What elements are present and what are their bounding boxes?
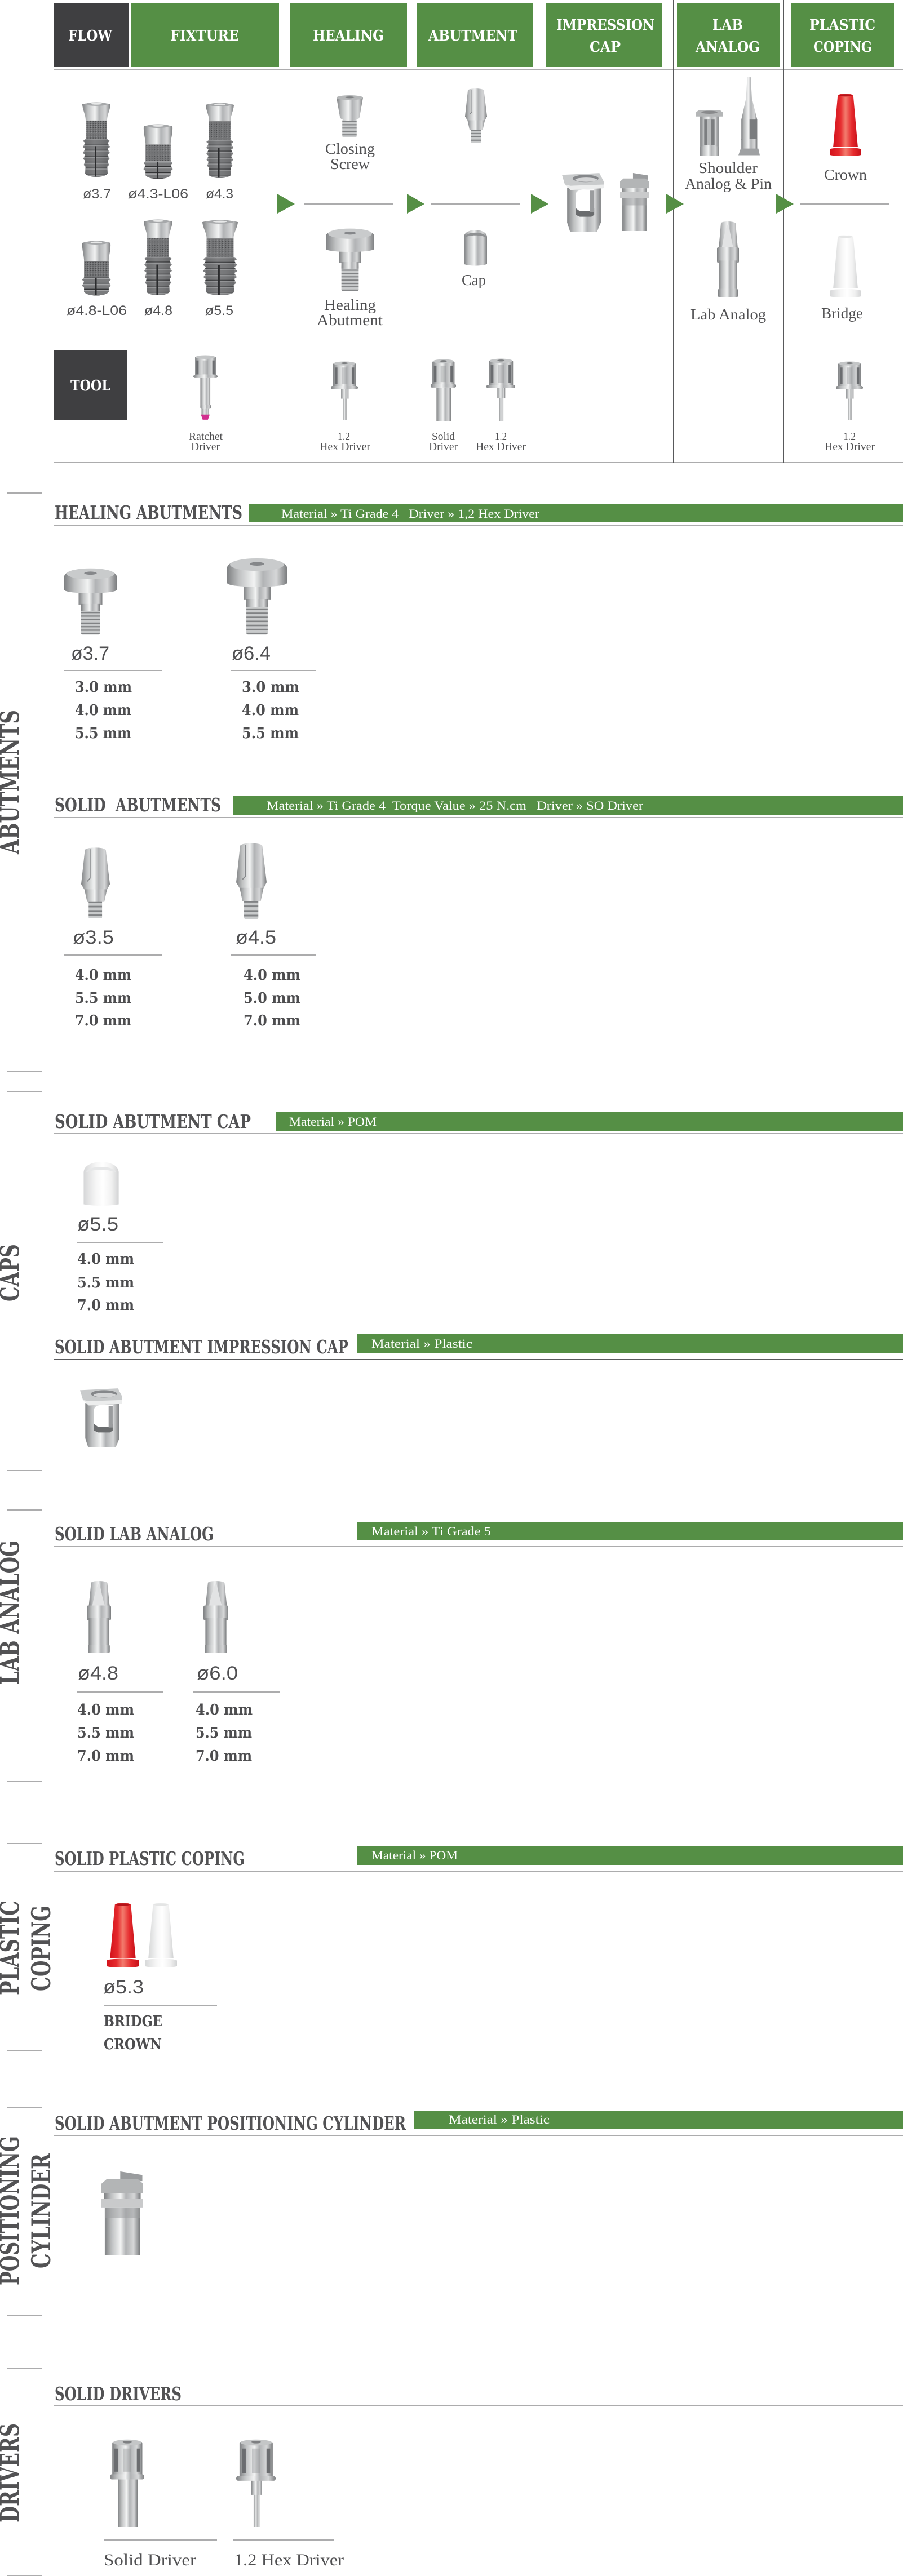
plastic coping header: PLASTIC	[809, 17, 875, 34]
lab analog header: ANALOG	[695, 39, 760, 56]
arrow 4	[666, 194, 684, 214]
arrow 5	[776, 194, 794, 214]
lab analog ø4.8: ø4.8	[78, 1663, 118, 1684]
spec bar: coping material: Material » POM	[371, 1848, 458, 1862]
lab analog: Lab Analog	[690, 306, 766, 323]
healing abutment: Healing	[324, 296, 376, 313]
heading: healing abutments: HEALING ABUTMENTS	[55, 501, 242, 523]
panel: flow chart	[54, 0, 903, 463]
healing abutment ø6.4: 4.0 mm	[242, 702, 299, 719]
solid abutment ø4.5: ø4.5	[236, 927, 276, 948]
healing abutment ø6.4: ø6.4	[232, 643, 271, 664]
panel: plastic coping	[0, 1844, 903, 2053]
impression cap	[562, 173, 604, 232]
heading: positioning cylinder: SOLID ABUTMENT POSITIONING CYLINDER	[55, 2112, 406, 2134]
fixture ø4.8: ø4.8	[144, 303, 172, 318]
closing screw: Closing	[325, 140, 375, 157]
fixture ø4.3: ø4.3	[206, 186, 233, 202]
fixture ø4.8	[144, 220, 172, 318]
lab analog header	[677, 3, 780, 67]
solid abutment ø4.5	[231, 843, 316, 1029]
heading: solid lab analog: SOLID LAB ANALOG	[55, 1523, 214, 1545]
abutment header: ABUTMENT	[428, 28, 518, 45]
lab analog ø4.8: 4.0 mm	[77, 1702, 134, 1718]
fixture ø4.3-L06	[128, 125, 188, 202]
flow header box	[54, 3, 129, 67]
spec bar: cap material: Material » POM	[289, 1114, 377, 1129]
spec bar: solid abutments	[233, 796, 903, 815]
spec bar: cylinder material: Material » Plastic	[449, 2112, 550, 2126]
lab analog ø6.0: 4.0 mm	[196, 1702, 253, 1718]
lab analog ø4.8: 5.5 mm	[77, 1725, 134, 1742]
red and white copings	[107, 1903, 177, 1967]
arrow 1	[277, 194, 295, 214]
spec bar: healing abutments: Material » Ti Grade 4 Driver » 1,2 Hex Driver	[281, 507, 540, 521]
ratchet driver: Ratchet	[189, 430, 223, 443]
fixture ø5.5: ø5.5	[205, 303, 233, 318]
positioning cylinder icon	[101, 2171, 143, 2255]
healing abutment ø3.7	[64, 569, 162, 742]
impression cap header: CAP	[590, 39, 621, 56]
shoulder analog and pin	[685, 77, 772, 192]
healing abutment ø6.4: 3.0 mm	[242, 679, 299, 696]
tool box	[54, 350, 127, 420]
coping diameter and types: ø5.3	[103, 1977, 144, 1998]
spec bar: solid abutments: Material » Ti Grade 4 Torque Value » 25 N.cm Driver » SO Driver	[267, 798, 644, 812]
white cap ø5.5	[77, 1162, 163, 1314]
hex driver, abutment	[476, 359, 526, 453]
solid abutment ø4.5: 5.0 mm	[244, 990, 300, 1007]
ratchet driver: Driver	[191, 441, 220, 453]
plastic coping header: COPING	[813, 39, 872, 56]
solid abutment ø3.5: 4.0 mm	[75, 967, 131, 984]
arrow 2	[407, 194, 424, 214]
plastic coping header	[791, 3, 894, 67]
solid abutment ø4.5: 4.0 mm	[244, 967, 300, 984]
healing abutment ø3.7: 3.0 mm	[75, 679, 132, 696]
panel: caps	[0, 1092, 903, 1471]
impression cap header	[546, 3, 662, 67]
healing abutment	[317, 229, 383, 328]
solid abutment ø3.5: 5.5 mm	[75, 990, 131, 1007]
lab analog	[690, 221, 766, 323]
lab analog header: LAB	[712, 17, 743, 34]
lab analog ø4.8	[77, 1581, 163, 1765]
heading: solid drivers: SOLID DRIVERS	[55, 2383, 182, 2405]
1.2 hex driver: 1.2 Hex Driver	[234, 2551, 344, 2569]
solid driver	[104, 2440, 217, 2569]
fixture ø4.8-L06: ø4.8-L06	[67, 303, 127, 318]
solid abutment ø3.5: 7.0 mm	[75, 1012, 131, 1029]
solid abutment ø3.5	[64, 847, 162, 1029]
impression cap header: IMPRESSION	[556, 17, 654, 34]
spec bar: coping material	[357, 1846, 903, 1865]
ratchet driver	[189, 356, 223, 453]
hex driver, healing	[320, 362, 370, 453]
white cap ø5.5: 5.5 mm	[77, 1274, 134, 1291]
solid driver: Solid	[432, 430, 455, 443]
impression cap icon	[80, 1388, 122, 1447]
solid abutment	[465, 88, 487, 143]
crown coping	[824, 94, 867, 183]
white cap ø5.5: 7.0 mm	[77, 1297, 134, 1314]
spec bar: cylinder material	[414, 2111, 903, 2129]
solid abutment ø4.5: 7.0 mm	[244, 1012, 300, 1029]
healing header: HEALING	[313, 28, 384, 45]
bridge coping	[821, 235, 863, 322]
fixture ø5.5	[202, 220, 238, 318]
lab analog ø6.0: 7.0 mm	[196, 1748, 252, 1765]
side label: positioning cylinder	[0, 2136, 56, 2285]
solid driver	[429, 359, 458, 453]
healing header	[290, 3, 407, 67]
spec bar: cap material	[276, 1112, 903, 1131]
hex driver, coping	[825, 362, 875, 453]
healing abutment ø3.7: ø3.7	[71, 643, 109, 664]
bridge coping: Bridge	[821, 305, 863, 322]
tool box: TOOL	[70, 377, 110, 394]
fixture ø4.3-L06: ø4.3-L06	[128, 186, 188, 202]
healing abutment ø3.7: 4.0 mm	[75, 702, 131, 719]
white cap ø5.5: ø5.5	[77, 1214, 118, 1235]
panel: drivers	[0, 2368, 903, 2575]
panel: positioning cylinder	[0, 2108, 903, 2315]
side label: plastic coping	[0, 1900, 56, 1995]
spec bar: impression cap material: Material » Plastic	[371, 1336, 472, 1351]
lab analog ø4.8: 7.0 mm	[77, 1748, 134, 1765]
spec bar: healing abutments	[249, 504, 903, 522]
crown coping: Crown	[824, 166, 867, 183]
closing screw	[325, 95, 375, 172]
healing abutment: Abutment	[317, 312, 383, 328]
healing abutment ø3.7: 5.5 mm	[75, 725, 131, 742]
positioning cylinder	[620, 173, 649, 231]
hex driver, coping: 1.2	[843, 430, 856, 443]
coping diameter and types: CROWN	[104, 2036, 162, 2053]
shoulder analog and pin: Analog & Pin	[685, 175, 772, 192]
side label: plastic coping: COPING	[26, 1906, 56, 1991]
heading: solid plastic coping: SOLID PLASTIC COPING	[55, 1847, 245, 1869]
arrow 3	[531, 194, 548, 214]
spec bar: lab analog material: Material » Ti Grade 5	[371, 1524, 491, 1538]
heading: solid abutment impression cap: SOLID ABUTMENT IMPRESSION CAP	[55, 1336, 348, 1358]
cap: Cap	[462, 272, 486, 288]
healing abutment ø6.4	[227, 558, 316, 742]
shoulder analog and pin: Shoulder	[698, 159, 758, 176]
heading: solid abutment cap: SOLID ABUTMENT CAP	[55, 1111, 251, 1132]
closing screw: Screw	[330, 156, 370, 172]
coping diameter and types	[103, 1977, 217, 2053]
white cap ø5.5: 4.0 mm	[77, 1251, 134, 1268]
lab analog ø6.0: ø6.0	[197, 1663, 238, 1684]
solid driver: Solid Driver	[104, 2551, 196, 2569]
hex driver, healing: Hex Driver	[320, 441, 370, 453]
hex driver, coping: Hex Driver	[825, 441, 875, 453]
side label: positioning cylinder: CYLINDER	[26, 2153, 56, 2268]
fixture ø4.8-L06	[67, 241, 127, 318]
lab analog ø6.0: 5.5 mm	[196, 1725, 252, 1742]
spec bar: lab analog material	[357, 1522, 903, 1540]
fixture header: FIXTURE	[170, 28, 239, 45]
fixture ø3.7: ø3.7	[83, 186, 111, 202]
solid driver: Driver	[429, 441, 458, 453]
flow header box: FLOW	[68, 28, 113, 45]
hex driver, abutment: 1.2	[495, 430, 507, 443]
lab analog ø6.0	[193, 1581, 280, 1765]
1.2 hex driver	[233, 2440, 344, 2569]
abutment header	[417, 3, 533, 67]
coping diameter and types: BRIDGE	[104, 2013, 162, 2030]
panel: lab analog	[0, 1510, 903, 1782]
panel: abutments	[0, 493, 903, 1072]
healing abutment ø6.4: 5.5 mm	[242, 725, 299, 742]
cap	[462, 230, 487, 288]
fixture ø4.3	[206, 103, 234, 202]
heading: solid abutments: SOLID ABUTMENTS	[55, 794, 221, 816]
spec bar: impression cap material	[357, 1334, 903, 1353]
hex driver, abutment: Hex Driver	[476, 441, 526, 453]
solid abutment ø3.5: ø3.5	[73, 927, 114, 948]
hex driver, healing: 1.2	[338, 430, 350, 443]
fixture header	[131, 3, 279, 67]
fixture ø3.7	[82, 103, 111, 202]
